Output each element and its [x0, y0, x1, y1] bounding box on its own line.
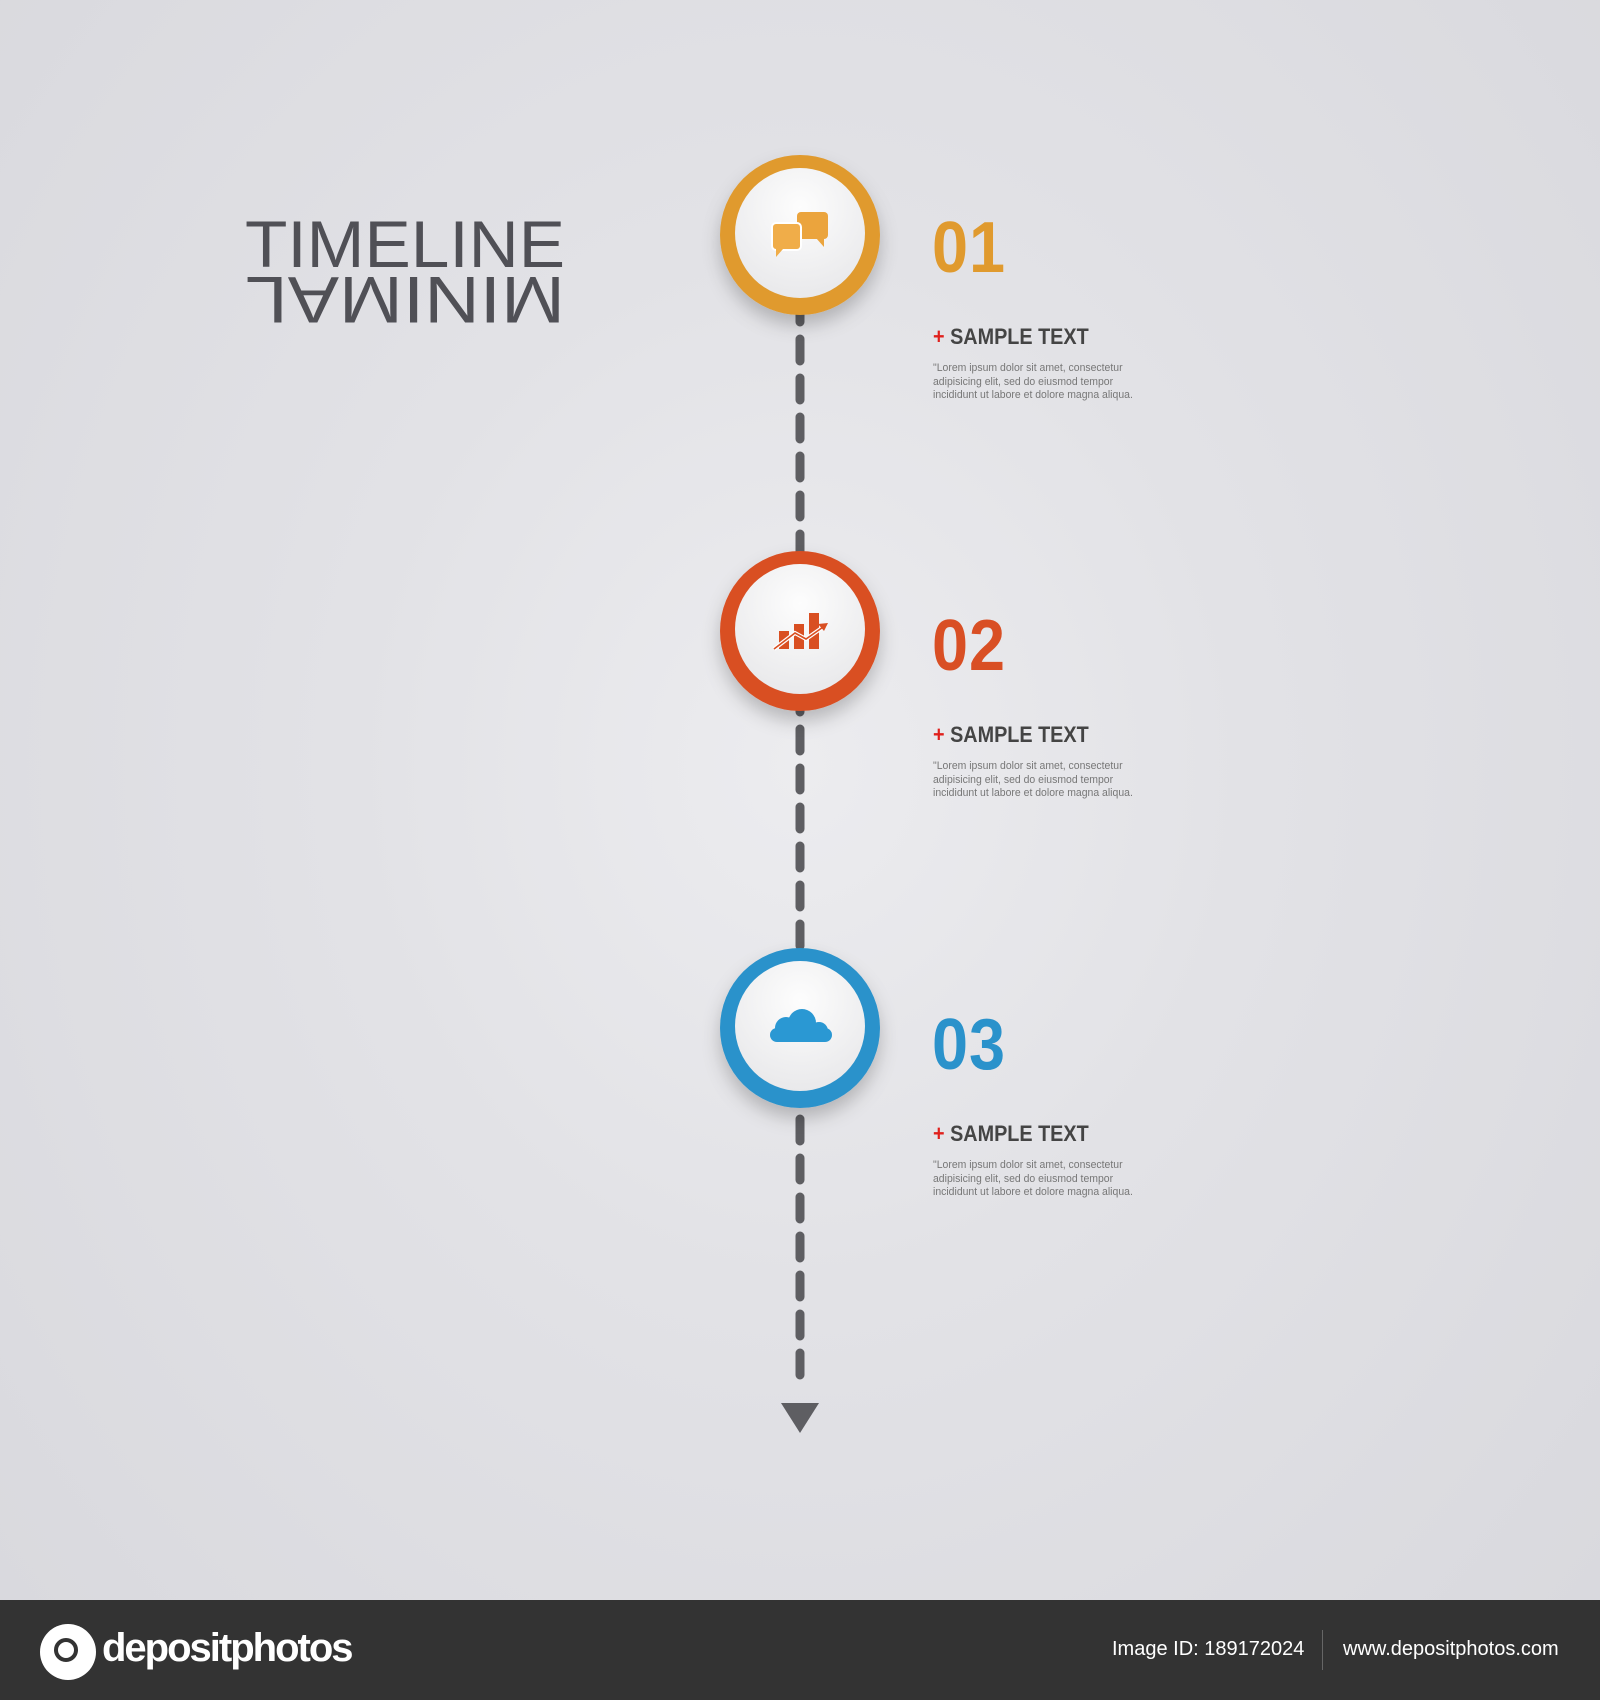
title	[245, 210, 565, 335]
number 03: 03	[932, 1005, 1006, 1085]
step 2 circle	[720, 551, 880, 711]
sample text 2: + SAMPLE TEXT	[933, 722, 1089, 747]
icon: chat bubbles	[772, 212, 828, 257]
lorem 2: "Lorem ipsum dolor sit amet, consectetur adipisicing elit, sed do eiusmod tempor incididunt ut labore et dolore magna aliqua.	[933, 760, 1133, 799]
footer logo	[40, 1624, 352, 1680]
icon: cloud	[770, 1009, 832, 1042]
lorem 3: "Lorem ipsum dolor sit amet, consectetur adipisicing elit, sed do eiusmod tempor incididunt ut labore et dolore magna aliqua.	[933, 1159, 1133, 1198]
sample text 3: + SAMPLE TEXT	[933, 1121, 1089, 1146]
footer id: Image ID: 189172024	[1112, 1638, 1304, 1660]
dashed line	[796, 300, 804, 1385]
number 02: 02	[932, 606, 1006, 686]
arrow	[781, 1403, 819, 1433]
footer	[0, 1600, 1600, 1700]
icon: chart	[779, 613, 819, 649]
title: MINIMAL	[245, 263, 565, 335]
footer url: www.depositphotos.com	[1343, 1638, 1559, 1660]
footer logo: depositphotos	[102, 1626, 352, 1670]
step 1 circle	[720, 155, 880, 315]
lorem 1: "Lorem ipsum dolor sit amet, consectetur adipisicing elit, sed do eiusmod tempor incididunt ut labore et dolore magna aliqua.	[933, 362, 1133, 401]
step 3 circle	[720, 948, 880, 1108]
sample text 1: + SAMPLE TEXT	[933, 324, 1089, 349]
number 01: 01	[932, 208, 1006, 288]
